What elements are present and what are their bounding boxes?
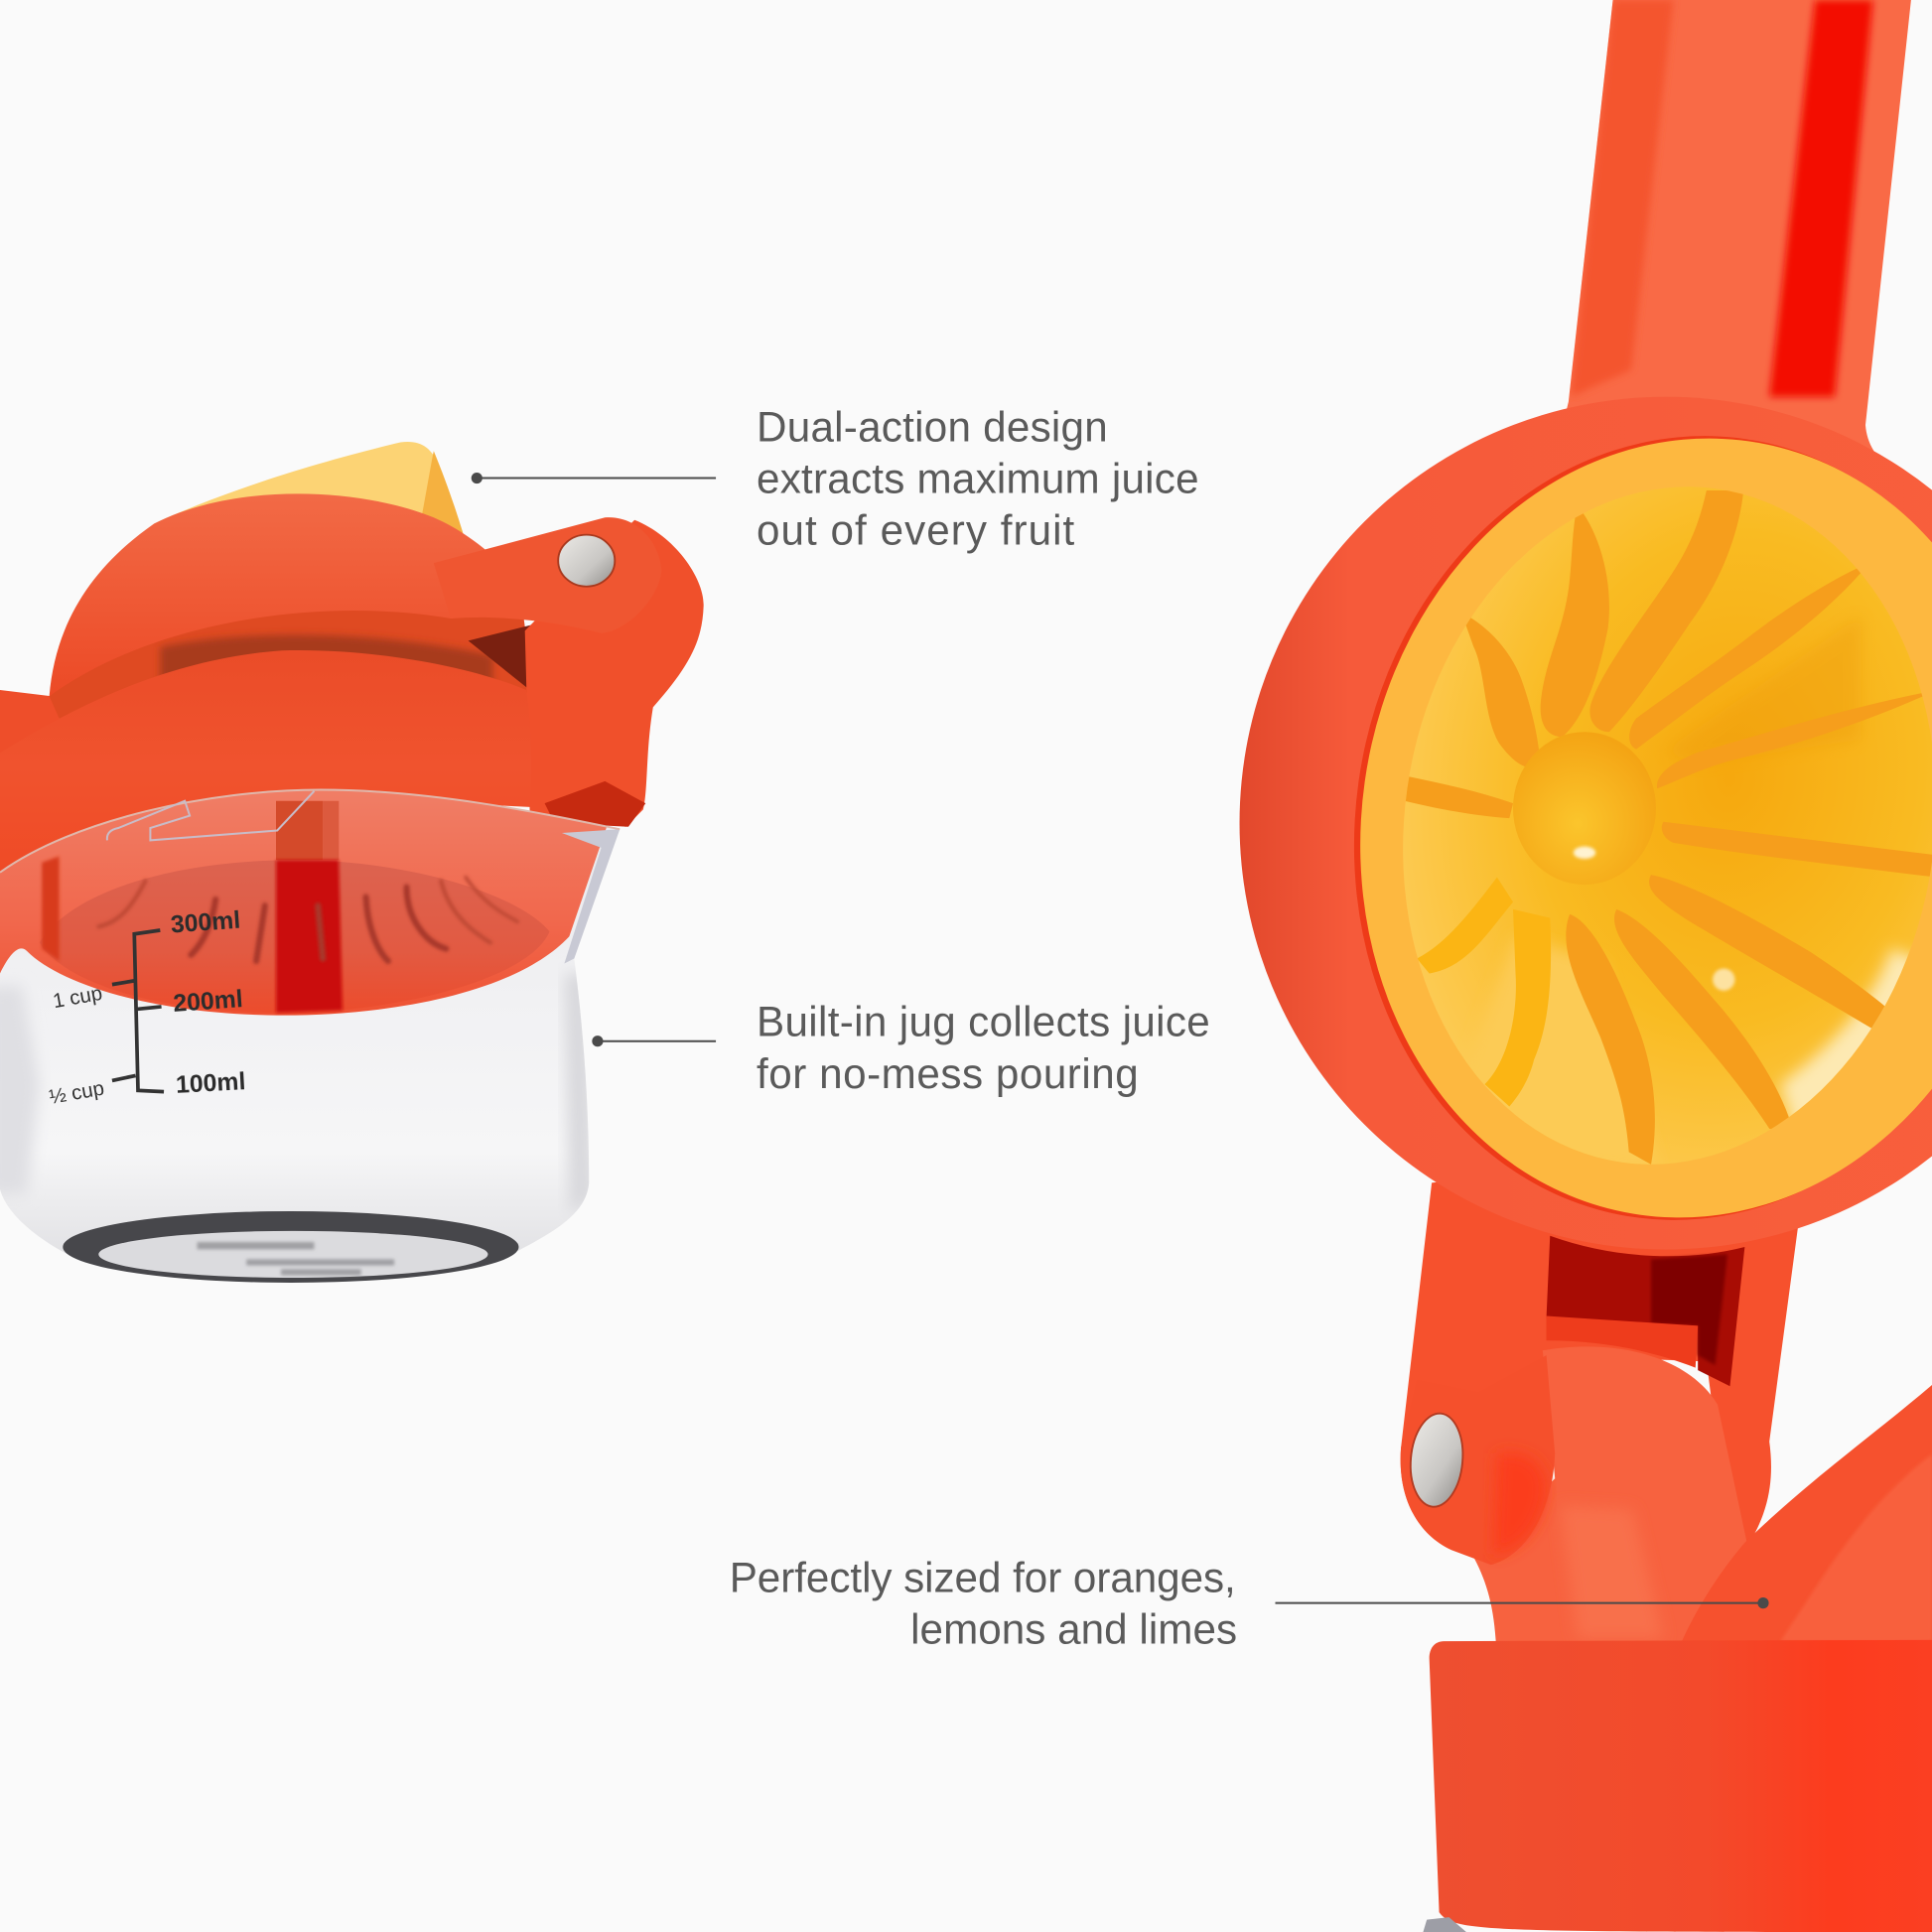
callout: dual-action design	[472, 403, 1199, 554]
scale bracket	[112, 930, 164, 1092]
leader line	[598, 1040, 716, 1042]
yellow rim	[1311, 395, 1932, 1261]
reamer rib shadows	[98, 878, 517, 961]
base cup	[1423, 1640, 1932, 1932]
callout text: extracts maximum juice	[757, 455, 1199, 501]
right cone of reamer base	[1682, 1385, 1932, 1641]
dot	[592, 1035, 604, 1046]
silver rivet	[1407, 1411, 1466, 1509]
label 300ml: 300ml	[170, 907, 241, 938]
well highlights	[1713, 968, 1734, 991]
callout text: Perfectly sized for oranges,	[730, 1554, 1236, 1600]
dark gap between lid and ring	[160, 635, 492, 690]
label 1 cup: 1 cup	[51, 982, 104, 1013]
steel pin	[558, 535, 615, 587]
glass side tint	[0, 986, 40, 1195]
upper lid dome	[50, 493, 517, 696]
head outer shell	[1240, 397, 1932, 1249]
callout text: out of every fruit	[757, 507, 1074, 554]
reamer disc	[40, 860, 550, 983]
well reflection and ribs	[1405, 490, 1932, 1171]
product: juicer side view with open press	[1240, 0, 1932, 1932]
handle slot outline on rim	[107, 791, 314, 840]
callout: built-in jug	[592, 999, 1210, 1097]
yellow reamer wedge	[154, 442, 466, 542]
yellow well	[1360, 452, 1932, 1199]
label 100ml: 100ml	[175, 1068, 246, 1099]
lever arm below head	[1401, 1159, 1799, 1565]
callout: perfectly sized	[730, 1554, 1769, 1653]
dot	[1757, 1597, 1769, 1608]
rear lever	[525, 520, 704, 827]
jug base	[63, 1211, 518, 1283]
product: juicer jug view	[0, 442, 704, 1283]
spout	[562, 829, 620, 964]
lid underside	[50, 573, 542, 752]
handle left recess	[1571, 0, 1673, 397]
glass jug body	[0, 790, 620, 1254]
centre hinge block	[1472, 1346, 1762, 1641]
dark triangle behind lever	[469, 622, 542, 690]
callout text: lemons and limes	[910, 1606, 1237, 1653]
red stripe upper	[276, 801, 323, 860]
central dome	[1513, 732, 1656, 885]
arm window	[1547, 1236, 1744, 1386]
ribs	[1405, 490, 1932, 1165]
base moulding marks	[198, 1242, 394, 1276]
callout text: Dual-action design	[757, 403, 1108, 450]
callout text: Built-in jug collects juice	[757, 999, 1210, 1045]
lever notch	[545, 781, 645, 827]
grey bottle collar	[1423, 1917, 1466, 1932]
left handle stub	[0, 690, 62, 878]
faint ribs	[1417, 878, 1551, 1106]
dot	[472, 473, 483, 483]
upper handle	[1567, 0, 1911, 451]
leader line	[1276, 1602, 1763, 1604]
hinge arm	[434, 517, 661, 633]
head red seam	[1304, 392, 1932, 1264]
hinge knuckle	[1401, 1355, 1555, 1565]
handle red channel	[1769, 0, 1872, 397]
lower ring collar	[0, 650, 531, 883]
leader line	[477, 478, 716, 480]
measurement scale	[48, 907, 246, 1109]
rim outline	[0, 790, 620, 873]
red stripe lower	[276, 860, 343, 1013]
arm window dark core	[1651, 1254, 1727, 1365]
callout text: for no-mess pouring	[757, 1050, 1139, 1097]
arm window crossbar	[1547, 1315, 1698, 1368]
label 200ml: 200ml	[173, 986, 244, 1018]
tinted rim band	[0, 788, 620, 1016]
reamer seen through glass	[0, 788, 620, 1213]
label half cup: ½ cup	[48, 1077, 106, 1109]
